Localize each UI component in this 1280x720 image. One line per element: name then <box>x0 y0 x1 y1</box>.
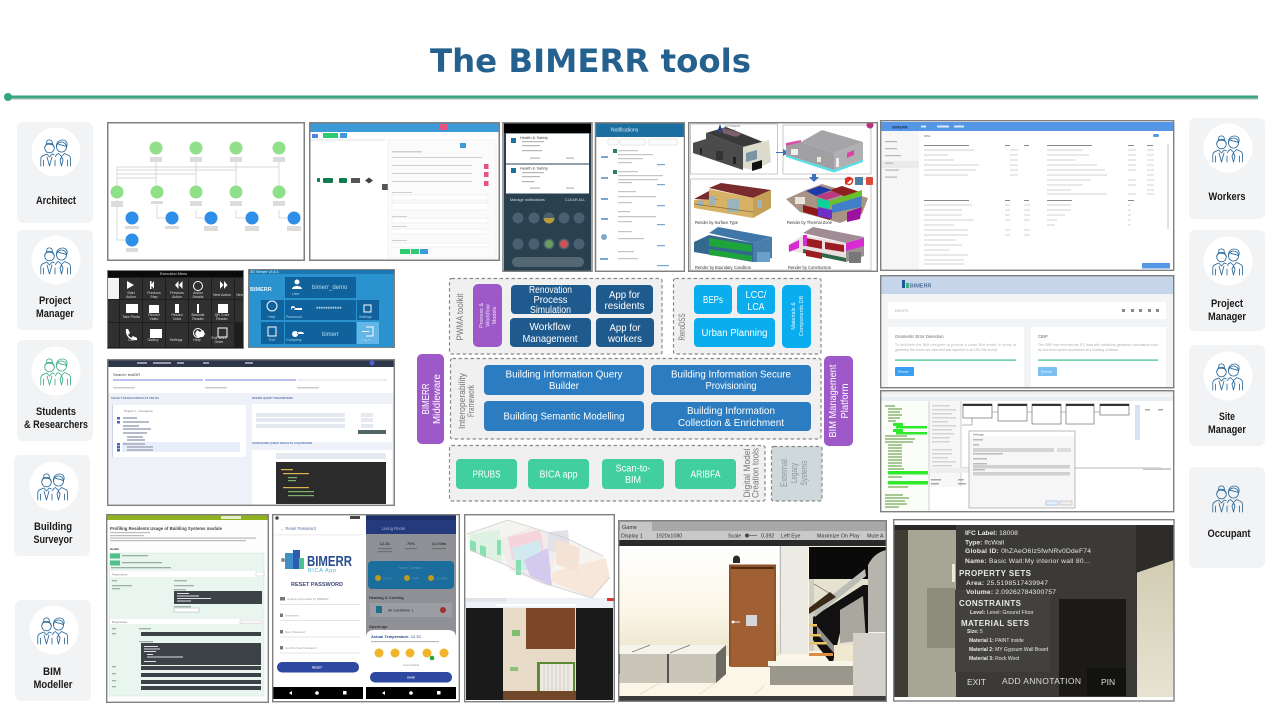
screenshot: BICA app phones: Unique id provided by BIMERR <box>287 597 329 601</box>
screenshot: execution menu: Call <box>128 338 134 342</box>
phone: room comfort: 70% <box>407 541 415 546</box>
render by surface type: Render by Surface Type <box>695 220 738 225</box>
screenshot: execution menu: Execution Menu <box>160 272 187 276</box>
panel: Digital Model Creation tools: PRUBS <box>472 470 501 480</box>
persona: Project Manager right: Project <box>1211 298 1243 310</box>
panel: PWMA toolkit: Renovation <box>529 285 572 296</box>
persona: Students and Researchers: Students <box>36 406 76 418</box>
screenshot: execution menu <box>107 270 244 349</box>
logos: AUTODESK <box>724 124 740 128</box>
screenshot: 3D viewer login: Help <box>268 315 275 319</box>
persona: Architect: Architect <box>36 195 76 207</box>
screenshot: workflow canvas with roles <box>309 122 500 261</box>
panel: PWMA toolkit: Workflow <box>530 322 571 333</box>
screenshot: BICA app phones: RESET <box>312 666 322 670</box>
phone: room comfort: 12.3C <box>380 541 390 546</box>
phone: room comfort: Actual Temperature: 12.3C <box>371 634 422 639</box>
AR text: Material 3: Rock Wool <box>969 656 1019 662</box>
screenshot: 3D viewer login: Password <box>286 315 302 319</box>
screenshot: 3D viewer login <box>248 269 395 348</box>
AR text: PROPERTY SETS <box>959 569 1032 578</box>
persona: Building Surveyor: Building <box>34 521 72 533</box>
screenshot: 3D viewer login: Exit <box>269 338 275 342</box>
screenshot: BICA app phones: Username <box>285 614 299 618</box>
screenshot: Unity game view: Mute A <box>867 534 884 540</box>
panel: Digital Model Creation tools: Digital Model <box>742 448 753 498</box>
phone: room comfort: Openings <box>369 624 388 629</box>
AR buttons <box>967 668 1126 696</box>
screenshot: profiling API documentation: Responses <box>112 620 128 624</box>
panel: RenoDSS <box>674 278 821 354</box>
render by boundary condition <box>694 227 772 270</box>
screenshot: KROFG tool cards: To facilitate the BIM designer to provide a clean BIM model in terms of <box>895 343 1016 347</box>
panel: PWMA toolkit: workers <box>607 334 642 345</box>
screenshot: execution menu: Action <box>172 295 182 299</box>
screenshot: Unity game view: Scale <box>728 534 741 540</box>
screenshot: Unity game view <box>618 520 887 702</box>
panel: RenoDSS: Urban Planning <box>702 328 768 339</box>
persona: Project Manager: Manager <box>36 308 75 320</box>
screenshot: KROFG tool cards: geometry the errors are detected and reported in an OBJ file format <box>895 348 997 352</box>
panel: Digital Model Creation tools: BICA app <box>540 470 578 480</box>
panel: PWMA toolkit: Management <box>522 334 578 345</box>
render by thermal zone <box>786 184 868 225</box>
dialog: Settings <box>973 432 984 436</box>
panel: RenoDSS: LCA <box>748 302 765 313</box>
screenshot: mobile notifications: Health & Safety <box>520 135 548 140</box>
panel: Interoperability Framework: Framework <box>466 385 477 417</box>
screenshot: execution menu: Order <box>215 340 224 344</box>
screenshot: execution menu: Previous <box>147 291 161 295</box>
screenshot: Unity game view: Game <box>622 525 637 531</box>
screenshot: profiling API documentation: Parameters <box>112 572 128 576</box>
panel: PWMA toolkit: Simulation <box>530 305 571 316</box>
screenshot: 3D viewer login: bimerr_demo <box>312 285 348 291</box>
AR text: IFC Label: 18008 <box>965 530 1018 537</box>
panel: Interoperability Framework: Building Semantic Modelling <box>504 412 624 422</box>
persona: Site Manager: Site <box>1219 411 1235 423</box>
render by construction <box>788 227 864 270</box>
side bar: BIM Management Platform: BIM Management <box>828 364 839 438</box>
screenshot: 3D viewer login: User <box>292 292 300 296</box>
screenshot: KROFG tool cards: CBIP <box>1038 334 1048 339</box>
panel: Interoperability Framework: Builder <box>549 381 580 392</box>
panel: PWMA toolkit: App for <box>609 290 641 301</box>
phone: room comfort: Air Conditioner 1 <box>388 608 413 612</box>
isometric model <box>467 520 610 598</box>
panel: RenoDSS: RenoDSS <box>677 314 688 340</box>
phone: room comfort: SAVE <box>407 676 415 680</box>
panel: External Legacy Systems: External <box>779 459 790 487</box>
screenshot: search query builder: SELECT SEARCH RESULTS FIELDS <box>111 396 159 400</box>
panel: Digital Model Creation tools: Creation tools <box>750 448 762 498</box>
persona: Occupant <box>1189 467 1265 568</box>
panel: RenoDSS: LCC/ <box>746 290 767 301</box>
panel: Digital Model Creation tools: BIM <box>625 475 641 486</box>
persona: Building Surveyor <box>14 455 90 556</box>
panel: External Legacy Systems: Legacy <box>789 463 800 483</box>
screenshot: KROFG tool cards: Geometric Error Detection <box>895 334 944 339</box>
screenshot: 3D viewer login: Company <box>286 338 302 342</box>
screenshot: mobile notifications: Notifications <box>611 128 639 134</box>
screenshot: BICA app phones: ← Reset Password <box>280 526 317 531</box>
screenshot: profiling API documentation: Profiling Residents Usage of Building Systems module <box>110 526 222 531</box>
screenshot: 3D model and AR room <box>464 514 615 702</box>
persona: Workers: Workers <box>1208 191 1246 203</box>
persona: Occupant: Occupant <box>1208 528 1251 540</box>
panel: Interoperability Framework: Building Information <box>687 406 775 417</box>
screenshot: execution menu: Start <box>127 291 135 295</box>
persona: Project Manager right <box>1189 230 1265 331</box>
panel: Digital Model Creation tools: Scan-to- <box>616 464 650 474</box>
AR text: Size: 5 <box>967 629 983 635</box>
screenshot: energy model renders <box>688 122 878 272</box>
screenshot: execution menu: Previous <box>170 291 184 295</box>
panel: Interoperability Framework: Building Information Query <box>506 370 622 380</box>
screenshot: ontology editor <box>880 390 1174 512</box>
persona: Project Manager right: Manager <box>1208 311 1247 323</box>
screenshot: KROFG tool cards: as 2nd-level space boundaries and shading surfaces <box>1038 348 1118 352</box>
phone: room comfort <box>366 515 456 699</box>
panel: RenoDSS: Components DB <box>799 295 805 336</box>
screenshot: BICA app phones: New Password <box>285 630 305 634</box>
AR text <box>959 530 1091 662</box>
AR text: Material 2: MY Gypsum Wall Board <box>969 647 1048 653</box>
phone: room comfort: Room Comfort <box>398 566 422 570</box>
side bar: BIMERR Middleware: BIMERR <box>421 384 432 414</box>
stairs <box>809 547 886 662</box>
screenshot: execution menu: Record <box>171 313 183 317</box>
screenshot: Unity game view: Display 1 <box>621 534 643 540</box>
panel: PWMA toolkit: Workflow <box>486 304 492 327</box>
render by boundary condition: Render by Boundary Condition <box>695 265 751 270</box>
panel: PWMA toolkit: PWMA toolkit <box>455 293 466 340</box>
screenshot: execution menu: Voice <box>173 317 181 321</box>
render by surface type <box>694 183 771 225</box>
screenshot: execution menu: Exit Work <box>212 336 227 340</box>
screenshot: execution menu: Details <box>193 295 204 299</box>
persona: Project Manager: Project <box>39 295 71 307</box>
screenshot: AR annotation view <box>893 519 1175 702</box>
header rule <box>4 93 1258 101</box>
screenshot: execution menu: QR Code <box>215 313 229 317</box>
screenshot: execution menu: Barcode <box>191 313 205 317</box>
screenshot: BICA app phones: Confirm New Password <box>285 646 317 650</box>
screenshot: BIM management dashboard table: KPIs <box>924 134 931 138</box>
panel: External Legacy Systems: Systems <box>799 460 810 486</box>
AR text: Global ID: 0hZAeO6Iz5fwNRv0DdeF74 <box>965 548 1091 555</box>
screenshot: KROFG tool cards: The CBIP tool enriches the IFC data with additional geometric information such <box>1038 343 1158 347</box>
screenshot: execution menu: Video <box>150 317 158 321</box>
AR buttons: PIN <box>1101 677 1115 687</box>
screenshot: mobile notifications: Manage notifications <box>510 198 545 202</box>
persona: Architect <box>17 122 93 223</box>
screenshot: BIM management dashboard table <box>880 120 1174 271</box>
logos <box>717 122 874 185</box>
screenshot: KROFG tool cards: Execute <box>898 370 909 374</box>
screenshot: execution menu: Settings <box>170 338 183 342</box>
side bar: BIM Management Platform: Platform <box>840 384 851 418</box>
phone: room comfort: 70% <box>412 576 419 580</box>
arrow: down <box>809 174 819 182</box>
persona: Site Manager <box>1189 345 1265 446</box>
screenshot: execution menu: Reader <box>216 317 229 321</box>
AR text: Type: IfcWall <box>965 540 1005 546</box>
screenshot: profiling API documentation <box>106 514 269 703</box>
furniture <box>619 633 886 701</box>
AR text: Material 1: PAINT inside <box>969 638 1024 644</box>
diagram: architecture <box>417 278 853 501</box>
screenshot: Unity game view: Maximize On Play <box>817 534 860 540</box>
screenshot: 3D viewer login: BIMERR <box>250 287 272 293</box>
phone: room comfort: Comfortable <box>403 663 420 667</box>
phone: room comfort: Heating & Cooling <box>369 595 404 600</box>
panel: RenoDSS: BEPs <box>703 295 723 306</box>
screenshot: BICA app phones: RESET PASSWORD <box>291 582 343 588</box>
arrow: right <box>776 149 789 156</box>
screenshot: Unity game view: 0.392 <box>761 534 774 540</box>
screenshot: KROFG tool cards: KROFG <box>895 309 909 313</box>
screenshot: 3D viewer login: Settings <box>359 315 372 319</box>
AR buttons: ADD ANNOTATION <box>1002 676 1081 686</box>
side bar: BIMERR Middleware <box>417 354 444 444</box>
panel: Interoperability Framework: Interoperability <box>457 373 468 429</box>
render by construction: Render by Construction <box>788 265 831 270</box>
door <box>729 556 776 667</box>
panel: PWMA toolkit: Process & <box>479 303 485 328</box>
panel: Interoperability Framework: Collection & Enrichment <box>678 418 784 429</box>
persona: Workers <box>1189 118 1265 219</box>
AR buttons: EXIT <box>967 677 986 687</box>
building: thermal model <box>786 130 863 172</box>
panel: PWMA toolkit: Models <box>492 306 498 324</box>
screenshot: execution menu: Help <box>193 338 201 342</box>
persona: Students and Researchers: & Researchers <box>24 419 88 431</box>
screenshot: search query builder: Project 1 - occupancy <box>124 409 153 413</box>
panel: PWMA toolkit: Process <box>534 295 568 306</box>
panel: Interoperability Framework: Building Information Secure <box>671 370 791 380</box>
screenshot: 3D viewer login: 3D Viewer v3.6.1 <box>250 270 279 274</box>
screenshot: execution menu: Step <box>150 295 158 299</box>
phone: room comfort: Living Room <box>382 526 406 531</box>
screenshot: KROFG tool cards: Execute <box>1041 370 1052 374</box>
screenshot: BICA app phones <box>272 514 460 702</box>
screenshot: workflow graph <box>107 122 305 261</box>
panel: PWMA toolkit: residents <box>604 301 644 312</box>
screenshot: execution menu: Record <box>148 313 160 317</box>
AR text: Name: Basic Wall:My interior wall 80... <box>965 558 1090 565</box>
logos: REVIT <box>724 128 736 133</box>
AR room view <box>466 608 613 700</box>
BIMERR logo: BIMERR <box>307 553 352 570</box>
screenshot: BIM management dashboard table: BIMERR <box>892 124 908 130</box>
screenshot: execution menu: Action <box>193 291 203 295</box>
panel: Interoperability Framework: Provisioning <box>706 381 756 392</box>
side bar: BIMERR Middleware: Middleware <box>432 374 443 424</box>
AR text: Level: Level: Ground Floor <box>970 610 1034 616</box>
screenshot: execution menu: Next <box>236 293 244 297</box>
BIMERR logo <box>281 550 352 574</box>
panel: Digital Model Creation tools <box>450 446 765 501</box>
phone: room comfort: 12.3C <box>383 576 393 580</box>
browser bar <box>465 598 614 608</box>
panel: External Legacy Systems <box>772 446 822 501</box>
AR text: MATERIAL SETS <box>961 619 1030 628</box>
panel: RenoDSS: Materials & <box>791 302 797 330</box>
dialog <box>969 431 1075 508</box>
screenshot: KROFG tool cards: BIMERR <box>910 284 931 290</box>
screenshot: mobile notifications: Health & Safety <box>520 166 548 170</box>
screenshot: profiling API documentation: Health <box>110 547 119 551</box>
side bar: BIM Management Platform <box>824 356 853 446</box>
screenshot: search query builder: DEFINE QUERY PARAMETERS <box>252 396 293 400</box>
persona: BIM Modeller: Modeller <box>34 679 73 691</box>
screenshot: search query builder: CONFIGURE QUERY RESULTS ACQUISITION <box>252 441 312 445</box>
render by thermal zone: Render by Thermal Zone <box>787 220 832 225</box>
phone: room comfort: 21.00lm <box>432 541 447 546</box>
screenshot: 3D viewer login: *********** <box>316 307 342 313</box>
phone: room comfort: 21.00lm <box>436 576 448 580</box>
persona: Site Manager: Manager <box>1208 424 1247 436</box>
screenshot: 3D viewer login: Log In <box>361 338 371 342</box>
BIMERR logo: BICA App <box>308 568 336 574</box>
persona: Project Manager <box>17 230 93 330</box>
screenshot: Unity game view: 1920x1080 <box>656 534 682 540</box>
persona: BIM Modeller: BIM <box>43 666 61 678</box>
screenshot: execution menu: Action <box>126 295 136 299</box>
screenshot: execution menu: Next Action <box>213 293 231 297</box>
screenshot: Unity game view: Left Eye <box>781 534 800 540</box>
AR text: Volume: 2.09262784300757 <box>966 589 1056 596</box>
title: The BIMERR tools <box>430 42 751 80</box>
screenshot: execution menu: Gallery <box>147 338 159 342</box>
screenshot: search query builder: Search: testDR <box>113 372 140 377</box>
persona: Building Surveyor: Surveyor <box>34 534 73 546</box>
screenshot: KROFG tool cards <box>880 275 1175 389</box>
screenshot: mobile notifications: CLEAR ALL <box>565 198 585 202</box>
panel: Interoperability Framework <box>450 358 821 439</box>
panel: PWMA toolkit <box>450 278 662 354</box>
panel: PWMA toolkit: App for <box>610 323 641 334</box>
AR text: CONSTRAINTS <box>959 599 1022 608</box>
persona: Students and Researchers <box>17 340 93 441</box>
screenshot: search query builder <box>107 359 395 506</box>
AR text: Area: 25.5198517439947 <box>966 580 1048 587</box>
screenshot: execution menu: Reader <box>192 317 205 321</box>
screenshot: execution menu: Take Photo <box>122 315 140 319</box>
panel: Digital Model Creation tools: ARIBFA <box>690 470 721 480</box>
persona: BIM Modeller <box>15 600 91 701</box>
building: source model <box>693 127 771 171</box>
screenshot: mobile notifications <box>502 122 685 272</box>
screenshot: 3D viewer login: bimerr <box>322 332 339 338</box>
